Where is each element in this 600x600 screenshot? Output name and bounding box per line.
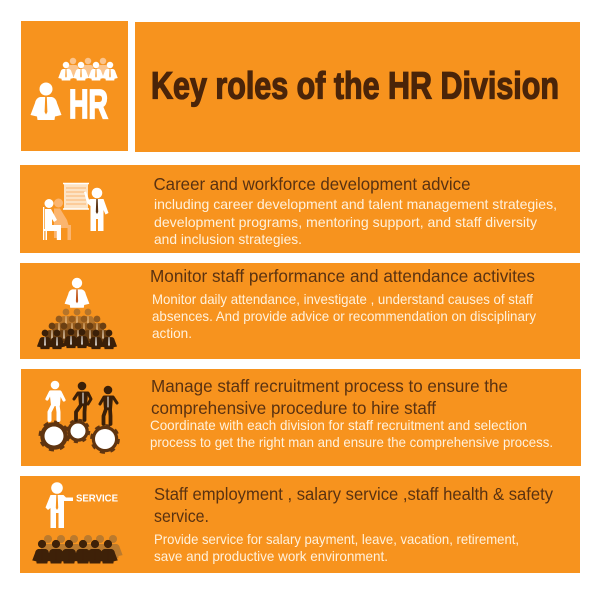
icon: faded back row of staff <box>65 58 111 76</box>
icon: seated audience <box>43 198 71 240</box>
description: Monitor daily attendance, investigate , understand causes of staff <box>152 291 533 307</box>
icon: dark walking candidate <box>74 382 91 420</box>
heading: comprehensive procedure to hire staff <box>151 398 436 418</box>
SERVICE label: SERVICE <box>76 492 118 504</box>
icon: HR manager <box>30 82 62 120</box>
icon: presentation board <box>63 183 89 209</box>
description <box>150 417 553 450</box>
icon: front crowd <box>32 540 118 564</box>
icon: supervisor <box>65 278 89 308</box>
icon: second dark walking candidate <box>100 386 117 424</box>
description: action. <box>152 325 192 341</box>
icon: front row of staff <box>58 62 118 80</box>
description: Provide service for salary payment, leave, vacation, retirement, <box>154 531 519 547</box>
description: save and productive work environment. <box>154 548 388 564</box>
description <box>154 196 557 247</box>
heading <box>151 376 508 418</box>
icon: service presenter <box>46 482 73 528</box>
heading: service. <box>154 506 209 526</box>
panel: manage recruitment <box>21 369 581 466</box>
panel: staff employment and service <box>20 476 580 573</box>
description <box>154 531 519 564</box>
icon: faded crowd <box>38 535 123 558</box>
description: and inclusion strategies. <box>154 231 302 247</box>
description <box>152 291 536 341</box>
panel: title <box>135 22 580 152</box>
description: process to get the right man and ensure the comprehensive process. <box>150 434 553 450</box>
panel: HR logo <box>21 21 128 151</box>
HR label: HR <box>69 81 108 127</box>
icon: white walking candidate <box>47 381 64 420</box>
heading: Monitor staff performance and attendance activites <box>150 266 535 286</box>
panel: monitor staff performance <box>20 263 580 359</box>
heading <box>154 484 553 526</box>
icon: gears <box>40 420 118 452</box>
description: including career development and talent management strategies, <box>154 196 557 212</box>
heading: Career and workforce development advice <box>154 174 470 194</box>
heading: Manage staff recruitment process to ensure the <box>151 376 508 396</box>
icon: staff pyramid <box>37 309 117 349</box>
heading: Staff employment , salary service ,staff health & safety <box>154 484 553 504</box>
icon: presenter <box>84 188 108 231</box>
description: development programs, mentoring support, and staff diversity <box>154 214 537 230</box>
description: Coordinate with each division for staff recruitment and selection <box>150 417 527 433</box>
description: absences. And provide advice or recommendation on disciplinary <box>152 308 536 324</box>
panel: career and workforce development <box>20 165 580 253</box>
